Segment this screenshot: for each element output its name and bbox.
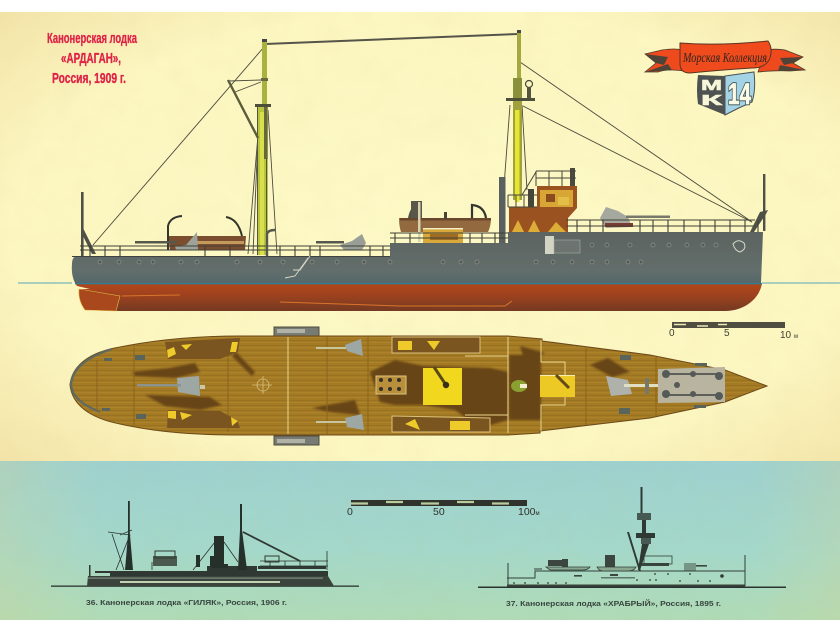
gun: forecastle: [600, 207, 670, 228]
caption: Gilyak: 36. Канонерская лодка «ГИЛЯК», Россия, 1906 г.: [86, 598, 287, 607]
ship silhouette: Khrabry: [478, 487, 786, 588]
waterline: [478, 586, 786, 588]
panel: teal lower band: [0, 461, 840, 620]
scale bar 10 m: 5: [724, 328, 730, 339]
ship silhouette: Gilyak: [51, 501, 359, 587]
waterline: [18, 282, 840, 284]
boats on deck: [165, 337, 490, 432]
hull: red underwater section: [75, 283, 762, 311]
masts and funnel: [125, 501, 247, 570]
stern edge highlight: [71, 349, 112, 412]
gun: lower waist: [316, 414, 364, 430]
title: [47, 31, 138, 87]
gun: stern centre: [137, 376, 205, 396]
pale deck lines: [288, 337, 565, 434]
gun: forecastle centre: [606, 376, 668, 396]
portholes: [98, 243, 718, 264]
fore mast: [506, 30, 535, 202]
ribbon: [645, 41, 805, 73]
ship deck plan: [70, 327, 767, 445]
deck houses: [89, 551, 328, 577]
vent pipe: [267, 230, 275, 256]
side sponsons: [274, 327, 319, 445]
logo: ribbon and shield: [645, 41, 805, 115]
shield: М: [701, 77, 722, 94]
scale bar 10 m: [669, 322, 798, 341]
ship boat: midship: [399, 201, 491, 242]
ship side elevation: Ardagan: [72, 30, 768, 311]
hull: [87, 576, 334, 586]
shield: 14: [728, 78, 751, 111]
shield: [697, 72, 755, 115]
scale bar 100 m: [347, 500, 540, 518]
title: Россия, 1909 г.: [52, 71, 126, 87]
staffs: [81, 174, 768, 256]
hull outline: [507, 555, 745, 586]
title: «АРДАГАН»,: [61, 51, 121, 67]
scale bar 100 m: 50: [433, 506, 445, 518]
small deck fittings: [102, 355, 707, 419]
shield: К: [701, 92, 724, 109]
rigging: [93, 47, 752, 254]
yellow funnel casing: [423, 367, 462, 405]
aft mast: [228, 39, 271, 255]
caption: Khrabry: 37. Канонерская лодка «ХРАБРЫЙ», Россия, 1895 г.: [506, 599, 721, 608]
scale bar 10 m: 0: [669, 328, 675, 339]
hull: grey topsides: [72, 232, 763, 283]
grey anchor deck plate: [658, 367, 725, 403]
aerial wire between masts: [265, 34, 518, 44]
title: Канонерская лодка: [47, 31, 138, 47]
bridge: [508, 168, 577, 232]
skylight: [376, 376, 406, 394]
waterline: [51, 586, 359, 587]
anchor: [733, 241, 745, 252]
scale bar 100 m: 100м: [518, 506, 540, 518]
ship boat: aft: [168, 216, 246, 250]
superstructures: [548, 555, 707, 578]
stay post by bridge: [499, 177, 506, 243]
shield: 14: [728, 78, 751, 111]
ribbon: Морская Коллекция: [682, 51, 767, 66]
gun: aft: [135, 232, 198, 250]
gun: waist: [316, 234, 366, 250]
compass platform: [252, 376, 272, 394]
scale bar 100 m: 0: [347, 506, 353, 518]
panel: cream paper background: [0, 12, 840, 461]
deck shadows: [132, 346, 630, 428]
railings: [80, 220, 758, 256]
yellow bridge deck: [511, 375, 575, 397]
portholes: [513, 573, 724, 584]
scale bar 10 m: 10 м: [780, 330, 798, 341]
mast: [627, 487, 655, 571]
gun: upper waist: [316, 339, 363, 356]
deck outline: [70, 336, 767, 435]
midship deckhouse: [423, 228, 463, 243]
